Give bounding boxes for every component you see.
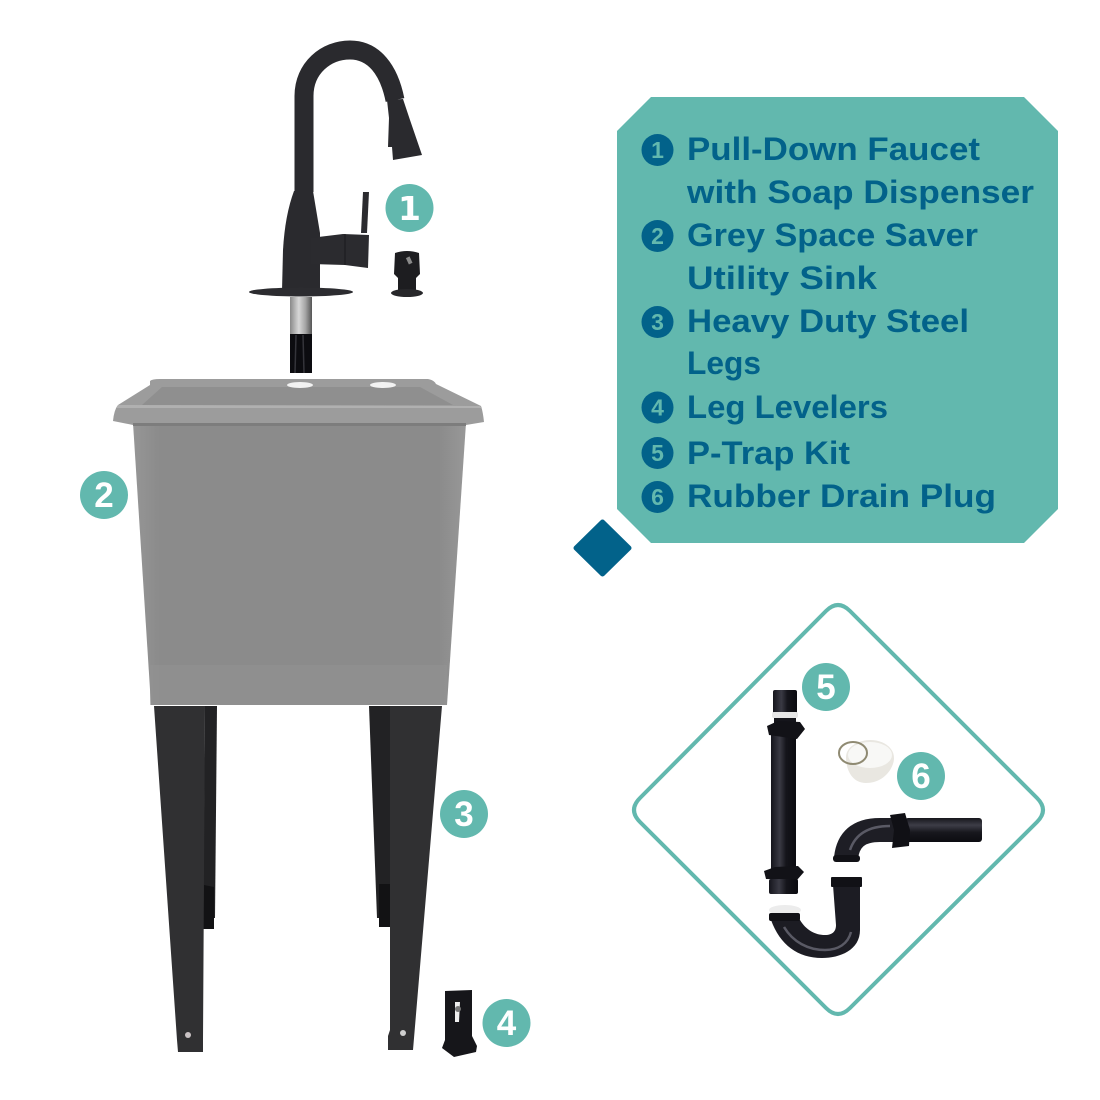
callout 5: 5 <box>816 668 836 707</box>
handle <box>310 192 369 268</box>
icon: small blue diamond <box>576 522 629 574</box>
list item 1: with Soap Dispenser <box>686 174 1034 210</box>
callout 6 <box>897 752 945 800</box>
right leg <box>369 706 442 1050</box>
list item 2: 2 <box>651 223 664 249</box>
panel: accessories diamond outline <box>634 605 1043 1014</box>
list item 3 <box>642 303 969 381</box>
gooseneck spout <box>304 50 395 192</box>
list item 5: 5 <box>651 440 664 466</box>
left leg <box>154 706 217 1052</box>
list item 1: Pull-Down Faucet <box>687 131 980 167</box>
deck plate <box>249 288 353 296</box>
callout 6: 6 <box>911 757 931 796</box>
faucet <box>249 50 422 373</box>
list item 3: 3 <box>651 309 664 335</box>
callout 2 <box>80 471 128 519</box>
list item 6: 6 <box>651 484 664 510</box>
callout 4: 4 <box>497 1004 517 1043</box>
list item 1: 1 <box>651 137 664 163</box>
list item 3: Heavy Duty Steel <box>687 303 969 339</box>
list item 2: Utility Sink <box>687 260 877 296</box>
list item 1 <box>642 131 1034 210</box>
panel: parts list <box>617 97 1058 543</box>
spray head <box>387 99 422 160</box>
rubber drain plug <box>839 740 894 783</box>
list item 5: P-Trap Kit <box>687 435 850 471</box>
trap bend <box>769 877 862 958</box>
sink legs <box>154 706 442 1052</box>
utility sink <box>113 379 484 1052</box>
callout 2: 2 <box>94 476 114 515</box>
soap dispenser <box>391 251 423 297</box>
list item 4: 4 <box>651 394 664 420</box>
p-trap kit <box>764 690 982 958</box>
tailpiece pipe <box>764 690 805 894</box>
list item 3: Legs <box>687 345 761 381</box>
callout 1: 1 <box>398 189 421 228</box>
elbow pipe <box>833 813 982 862</box>
callout 3 <box>440 790 488 838</box>
callout 5 <box>802 663 850 711</box>
leg leveler <box>442 990 477 1057</box>
callout 3: 3 <box>454 795 474 834</box>
sink basin interior <box>142 387 453 405</box>
sink rim <box>113 379 484 425</box>
sink basin body <box>133 423 466 705</box>
braided hose <box>290 297 312 373</box>
list item 6: Rubber Drain Plug <box>687 478 996 514</box>
callout 4 <box>482 999 530 1047</box>
list item 2: Grey Space Saver <box>687 217 978 253</box>
callout 1 <box>386 184 434 232</box>
list item 2 <box>642 217 978 296</box>
list item 4: Leg Levelers <box>687 389 888 425</box>
faucet body <box>282 191 320 291</box>
faucet holes <box>287 382 396 388</box>
